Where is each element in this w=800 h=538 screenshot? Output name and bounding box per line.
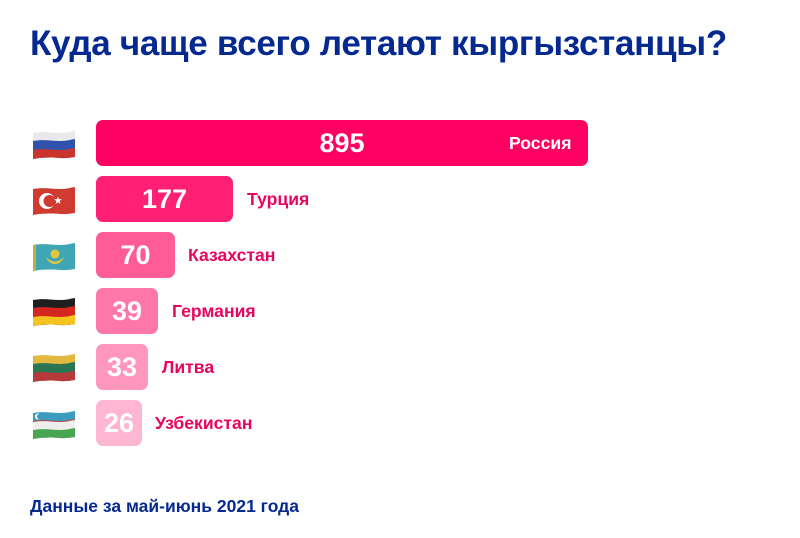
label: Узбекистан: Узбекистан (155, 413, 252, 433)
icon: flag of Kazakhstan (33, 243, 75, 271)
label: Турция: Турция (247, 189, 309, 209)
icon: flag of Uzbekistan (33, 411, 75, 439)
value: 70: 70 (120, 240, 151, 270)
value: 895: 895 (319, 128, 365, 158)
bar: Литва (96, 344, 148, 390)
value: 39: 39 (112, 296, 142, 326)
value: 26: 26 (104, 408, 134, 438)
footnote: Данные за май-июнь 2021 года (30, 496, 299, 516)
label: Казахстан: Казахстан (188, 245, 275, 265)
icon: flag of Germany (33, 298, 75, 326)
icon: flag of Russia (33, 131, 75, 159)
bar: Узбекистан (96, 400, 142, 446)
value: 177: 177 (142, 184, 187, 214)
bar: Казахстан (96, 232, 175, 278)
bar: Турция (96, 176, 233, 222)
label: Литва: Литва (162, 357, 214, 377)
icon: flag of Lithuania (33, 354, 75, 382)
label: Россия: Россия (509, 133, 571, 153)
value: 33: 33 (107, 352, 137, 382)
bar: Россия (96, 120, 588, 166)
bar: Германия (96, 288, 158, 334)
label: Германия: Германия (172, 301, 256, 321)
title: Куда чаще всего летают кыргызстанцы? (30, 24, 727, 63)
icon: flag of Turkey (33, 187, 75, 215)
